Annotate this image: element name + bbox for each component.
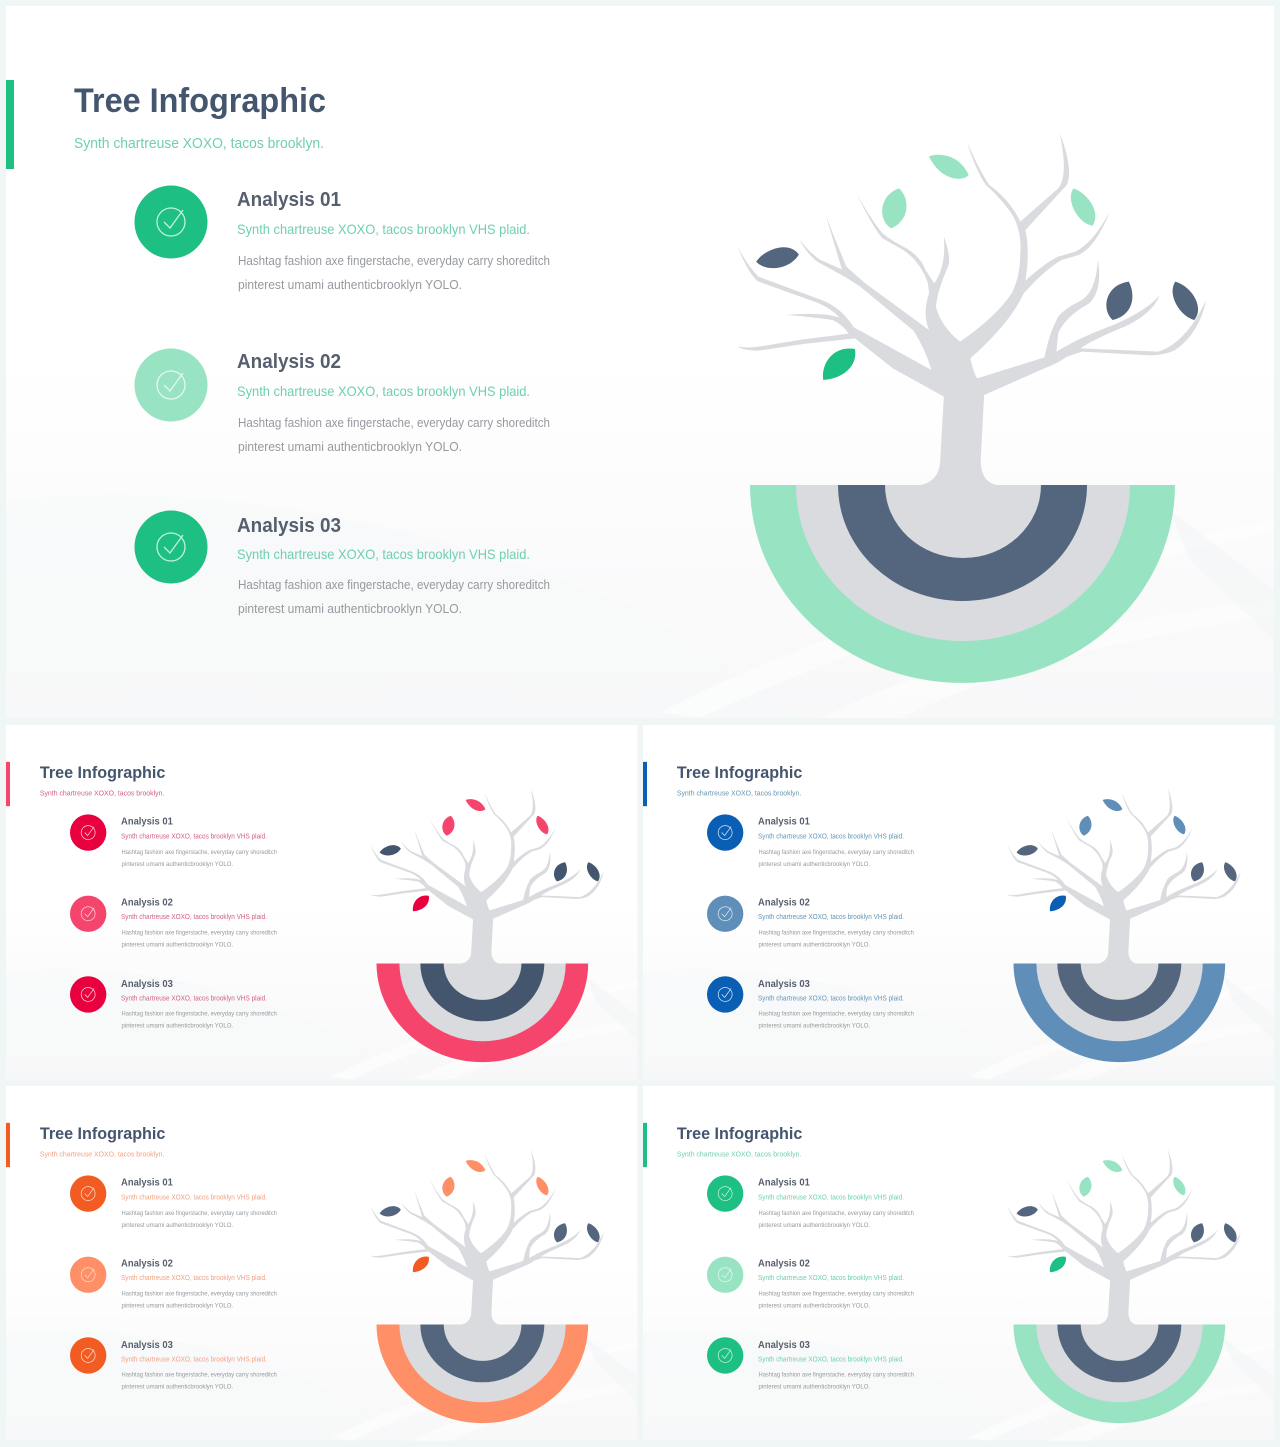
ring: inner [444, 1325, 521, 1361]
tree trunk and branches [737, 133, 1206, 486]
ring: middle [1036, 1325, 1203, 1402]
body text: Hashtag fashion axe fingerstache, everyday carry shoreditch [759, 1010, 914, 1017]
body text: Hashtag fashion axe fingerstache, everyday carry shoreditch [238, 416, 550, 430]
item: analysis 01 [70, 814, 277, 868]
subheading: Synth chartreuse XOXO, tacos brooklyn VHS plaid. [758, 1195, 904, 1202]
icon: check circle [70, 1257, 106, 1293]
icon: check circle [707, 1175, 743, 1212]
body text: Hashtag fashion axe fingerstache, everyday carry shoreditch [122, 1291, 277, 1298]
tree illustration [737, 133, 1206, 683]
item: analysis 03 [70, 1337, 277, 1390]
panel: small slide, red [6, 725, 637, 1080]
body text: pinterest umami authenticbrooklyn YOLO. [238, 278, 462, 292]
title: Tree Infographic [40, 1124, 165, 1143]
ring: outer [1014, 1325, 1225, 1423]
panel: small slide, green [643, 1086, 1274, 1441]
heading: Analysis 02 [237, 351, 341, 373]
body text: Hashtag fashion axe fingerstache, everyday carry shoreditch [122, 1210, 277, 1217]
body text: pinterest umami authenticbrooklyn YOLO. [759, 1303, 870, 1310]
title: Tree Infographic [677, 763, 802, 782]
panel: main slide, green [6, 6, 1274, 718]
tree illustration [1007, 1149, 1241, 1423]
body text: pinterest umami authenticbrooklyn YOLO. [238, 602, 462, 616]
panel: small slide, orange [6, 1086, 637, 1441]
subheading: Synth chartreuse XOXO, tacos brooklyn VHS plaid. [121, 995, 267, 1002]
body text: Hashtag fashion axe fingerstache, everyday carry shoreditch [759, 849, 914, 856]
leaves [1017, 1160, 1237, 1272]
ring: middle [399, 1325, 566, 1402]
body text: Hashtag fashion axe fingerstache, everyday carry shoreditch [759, 930, 914, 937]
heading: Analysis 03 [121, 1340, 173, 1351]
item: analysis 02 [707, 1257, 914, 1310]
ring: dark [420, 1325, 544, 1382]
tree trunk and branches [370, 1149, 604, 1325]
subheading: Synth chartreuse XOXO, tacos brooklyn VHS plaid. [758, 914, 904, 921]
body text: pinterest umami authenticbrooklyn YOLO. [759, 861, 870, 868]
icon: check circle [70, 814, 106, 851]
tree trunk and branches [370, 788, 604, 964]
body text: pinterest umami authenticbrooklyn YOLO. [759, 942, 870, 949]
heading: Analysis 03 [237, 515, 341, 537]
title: Tree Infographic [74, 82, 326, 120]
body text: pinterest umami authenticbrooklyn YOLO. [759, 1022, 870, 1029]
leaves [380, 799, 600, 911]
item: analysis 03 [707, 1337, 914, 1390]
heading: Analysis 02 [758, 1258, 810, 1269]
icon: check circle [134, 348, 208, 422]
accent bar [6, 80, 14, 169]
body text: pinterest umami authenticbrooklyn YOLO. [122, 1383, 233, 1390]
icon: check circle [707, 976, 743, 1013]
ring: middle [399, 964, 566, 1041]
body text: Hashtag fashion axe fingerstache, everyday carry shoreditch [759, 1291, 914, 1298]
item: analysis 01 [70, 1175, 277, 1229]
accent bar [6, 1123, 10, 1167]
icon: check circle [70, 1175, 106, 1212]
leaves [756, 155, 1198, 380]
subheading: Synth chartreuse XOXO, tacos brooklyn VHS plaid. [237, 383, 530, 399]
icon: check circle [70, 1337, 106, 1374]
item: analysis 01 [707, 1175, 914, 1229]
item: analysis 02 [70, 1257, 277, 1310]
body text: Hashtag fashion axe fingerstache, everyday carry shoreditch [238, 578, 550, 592]
accent bar [643, 1123, 647, 1167]
item: analysis 02 [707, 896, 914, 949]
subheading: Synth chartreuse XOXO, tacos brooklyn VHS plaid. [237, 221, 530, 237]
tree illustration [1007, 788, 1241, 1062]
icon: check circle [134, 510, 208, 584]
body text: pinterest umami authenticbrooklyn YOLO. [122, 942, 233, 949]
accent bar [643, 762, 647, 806]
item: analysis 03 [707, 976, 914, 1029]
title: Tree Infographic [677, 1124, 802, 1143]
subtitle: Synth chartreuse XOXO, tacos brooklyn. [74, 135, 324, 152]
heading: Analysis 01 [237, 189, 341, 211]
ring: outer [1014, 964, 1225, 1062]
ring: outer [377, 964, 588, 1062]
ring: inner [885, 485, 1041, 558]
body text: pinterest umami authenticbrooklyn YOLO. [122, 1303, 233, 1310]
body text: Hashtag fashion axe fingerstache, everyday carry shoreditch [122, 1010, 277, 1017]
tree illustration [370, 1149, 604, 1423]
subheading: Synth chartreuse XOXO, tacos brooklyn VHS plaid. [121, 914, 267, 921]
tree illustration [370, 788, 604, 1062]
tree trunk and branches [1007, 1149, 1241, 1325]
subheading: Synth chartreuse XOXO, tacos brooklyn VHS plaid. [121, 1356, 267, 1363]
heading: Analysis 03 [758, 979, 810, 990]
body text: pinterest umami authenticbrooklyn YOLO. [122, 861, 233, 868]
body text: Hashtag fashion axe fingerstache, everyday carry shoreditch [122, 930, 277, 937]
item: analysis 01 [707, 814, 914, 868]
item: analysis 03 [70, 976, 277, 1029]
heading: Analysis 01 [758, 1178, 810, 1189]
heading: Analysis 02 [121, 1258, 173, 1269]
heading: Analysis 02 [758, 897, 810, 908]
body text: Hashtag fashion axe fingerstache, everyday carry shoreditch [759, 1371, 914, 1378]
body text: pinterest umami authenticbrooklyn YOLO. [122, 1022, 233, 1029]
ring: dark [1057, 964, 1181, 1021]
icon: check circle [70, 976, 106, 1013]
item: analysis 01 [134, 186, 550, 292]
icon: check circle [707, 814, 743, 851]
body text: Hashtag fashion axe fingerstache, everyday carry shoreditch [238, 254, 550, 268]
body text: Hashtag fashion axe fingerstache, everyday carry shoreditch [122, 1371, 277, 1378]
leaves [380, 1160, 600, 1272]
tree trunk and branches [1007, 788, 1241, 964]
heading: Analysis 02 [121, 897, 173, 908]
leaves [1017, 799, 1237, 911]
heading: Analysis 03 [758, 1340, 810, 1351]
ring: inner [1081, 964, 1158, 1000]
item: analysis 03 [134, 510, 550, 616]
ring: outer [750, 485, 1175, 683]
ring: dark [1057, 1325, 1181, 1382]
body text: pinterest umami authenticbrooklyn YOLO. [759, 1222, 870, 1229]
subheading: Synth chartreuse XOXO, tacos brooklyn VHS plaid. [758, 1356, 904, 1363]
body text: pinterest umami authenticbrooklyn YOLO. [238, 440, 462, 454]
ring: middle [1036, 964, 1203, 1041]
subtitle: Synth chartreuse XOXO, tacos brooklyn. [40, 789, 164, 798]
accent bar [6, 762, 10, 806]
ring: inner [1081, 1325, 1158, 1361]
icon: check circle [707, 1257, 743, 1293]
icon: check circle [707, 896, 743, 932]
ring: middle [796, 485, 1130, 641]
subheading: Synth chartreuse XOXO, tacos brooklyn VHS plaid. [758, 995, 904, 1002]
body text: Hashtag fashion axe fingerstache, everyday carry shoreditch [122, 849, 277, 856]
title: Tree Infographic [40, 763, 165, 782]
subheading: Synth chartreuse XOXO, tacos brooklyn VHS plaid. [121, 1275, 267, 1282]
body text: pinterest umami authenticbrooklyn YOLO. [759, 1383, 870, 1390]
subtitle: Synth chartreuse XOXO, tacos brooklyn. [677, 1150, 801, 1159]
ring: outer [377, 1325, 588, 1423]
body text: Hashtag fashion axe fingerstache, everyday carry shoreditch [759, 1210, 914, 1217]
subtitle: Synth chartreuse XOXO, tacos brooklyn. [677, 789, 801, 798]
subheading: Synth chartreuse XOXO, tacos brooklyn VHS plaid. [758, 1275, 904, 1282]
subheading: Synth chartreuse XOXO, tacos brooklyn VHS plaid. [758, 834, 904, 841]
icon: check circle [70, 896, 106, 932]
heading: Analysis 01 [758, 817, 810, 828]
body text: pinterest umami authenticbrooklyn YOLO. [122, 1222, 233, 1229]
ring: dark [838, 485, 1087, 601]
subheading: Synth chartreuse XOXO, tacos brooklyn VHS plaid. [237, 546, 530, 562]
subheading: Synth chartreuse XOXO, tacos brooklyn VHS plaid. [121, 834, 267, 841]
panel: small slide, blue [643, 725, 1274, 1080]
icon: check circle [134, 186, 208, 258]
ring: inner [444, 964, 521, 1000]
subtitle: Synth chartreuse XOXO, tacos brooklyn. [40, 1150, 164, 1159]
icon: check circle [707, 1337, 743, 1374]
subheading: Synth chartreuse XOXO, tacos brooklyn VHS plaid. [121, 1195, 267, 1202]
item: analysis 02 [70, 896, 277, 949]
heading: Analysis 03 [121, 979, 173, 990]
ring: dark [420, 964, 544, 1021]
item: analysis 02 [134, 348, 550, 454]
heading: Analysis 01 [121, 1178, 173, 1189]
heading: Analysis 01 [121, 817, 173, 828]
